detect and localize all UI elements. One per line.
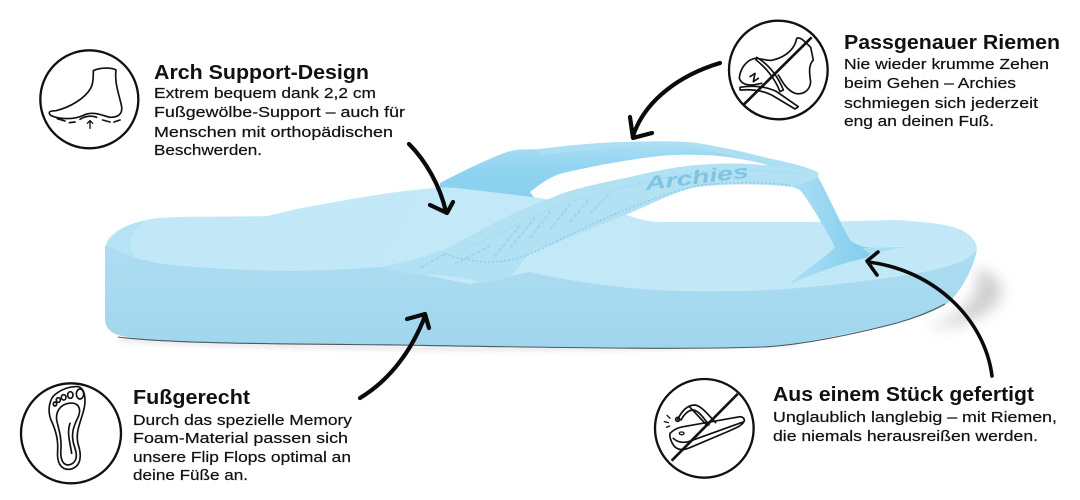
- text block: die niemals herausreißen werden.: [773, 428, 1038, 445]
- panel: aus einem stueck: [655, 379, 1057, 478]
- text block: [154, 85, 405, 159]
- near strap: [380, 164, 818, 282]
- arrow: one piece: [867, 252, 992, 376]
- text block: eng an deinen Fuß.: [844, 113, 994, 130]
- toe post: [788, 175, 878, 285]
- text block: [773, 409, 1057, 445]
- text block: Nie wieder krumme Zehen: [844, 56, 1049, 73]
- text block: Unglaublich langlebig – mit Riemen,: [773, 409, 1057, 426]
- footbed texture: [108, 191, 975, 290]
- icon: foot with arch: [40, 50, 138, 148]
- arrow: arch support: [409, 144, 453, 213]
- heading: Fußgerecht: [133, 387, 250, 409]
- text block: Foam-Material passen sich: [133, 430, 348, 447]
- icon: footprint: [21, 383, 121, 483]
- text block: Extrem bequem dank 2,2 cm: [154, 85, 376, 102]
- far strap: [440, 141, 817, 205]
- text block: Durch das spezielle Memory: [133, 412, 353, 429]
- text block: Beschwerden.: [154, 142, 262, 159]
- text block: deine Füße an.: [133, 467, 248, 484]
- text block: [133, 412, 353, 484]
- arrow: memory foam: [360, 314, 429, 398]
- text block: [844, 56, 1049, 130]
- icon: no crooked toes: [729, 21, 828, 119]
- text block: Menschen mit orthopädischen: [154, 124, 393, 141]
- arrow: strap: [630, 63, 720, 138]
- flip flop illustration: [105, 141, 1002, 349]
- sole side wall: [105, 225, 977, 348]
- panel: passgenauer riemen: [729, 21, 1060, 130]
- text block: schmiegen sich jederzeit: [844, 95, 1039, 112]
- sole top surface: [106, 188, 977, 291]
- panel: arch support: [40, 50, 405, 159]
- strap logo: Archies: [643, 161, 750, 195]
- text block: Fußgewölbe-Support – auch für: [154, 104, 405, 121]
- strap pattern: [420, 192, 610, 268]
- heading: Arch Support-Design: [154, 62, 369, 84]
- panel: fussgerecht: [21, 383, 353, 484]
- heading: Aus einem Stück gefertigt: [773, 384, 1034, 406]
- text block: unsere Flip Flops optimal an: [133, 449, 351, 466]
- text block: beim Gehen – Archies: [844, 75, 1016, 92]
- icon: no broken strap: [655, 379, 754, 478]
- heading: Passgenauer Riemen: [844, 32, 1060, 54]
